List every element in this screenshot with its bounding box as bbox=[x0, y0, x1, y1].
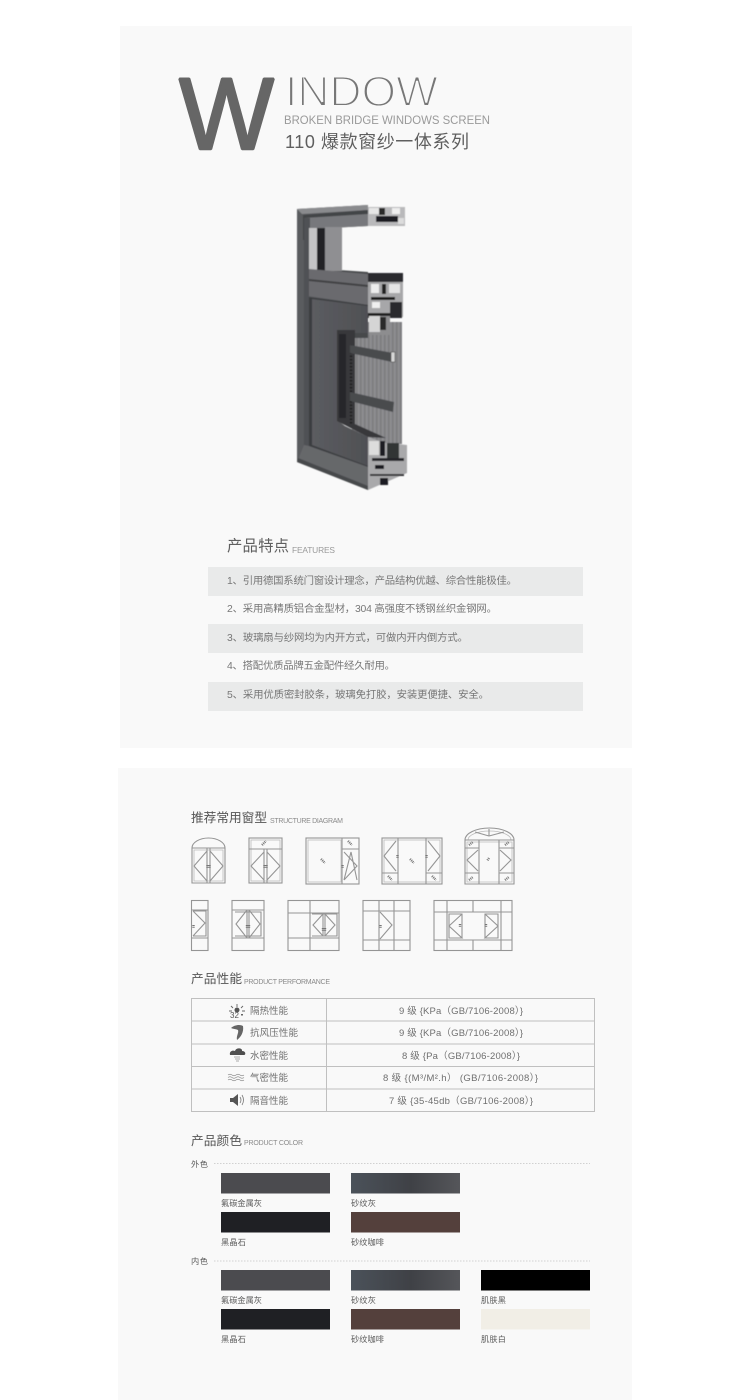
title: WINDOW bbox=[179, 57, 438, 171]
row: heat insulation bbox=[229, 1004, 523, 1020]
heading: performance: PRODUCT PERFORMANCE bbox=[244, 979, 330, 986]
swatch: fluorocarbon metal grey: 氟碳金属灰 bbox=[221, 1295, 262, 1305]
feature 3 bbox=[208, 624, 583, 653]
row: air tightness bbox=[228, 1072, 538, 1084]
colors: interior bbox=[191, 1256, 590, 1344]
colors: exterior bbox=[191, 1159, 590, 1247]
window type 5 bbox=[465, 828, 514, 884]
feature list bbox=[208, 567, 583, 711]
feature 1 bbox=[208, 567, 583, 596]
row: water tightness bbox=[230, 1048, 520, 1062]
swatch: skin black: 肌肤黑 bbox=[481, 1295, 506, 1305]
feature 2: 2、采用高精质铝合金型材，304 高强度不锈钢丝织金钢网。 bbox=[227, 602, 497, 615]
heading: features bbox=[227, 537, 335, 555]
swatch: sand coffee bbox=[351, 1309, 460, 1344]
swatch: sand grey bbox=[351, 1173, 460, 1208]
icon: sun: 32 bbox=[230, 1011, 239, 1020]
row: air tightness: 气密性能 bbox=[250, 1072, 288, 1084]
bottom section end bbox=[368, 437, 407, 490]
window type 9 bbox=[363, 900, 410, 950]
row: water tightness: 8 级 {Pa（GB/7106-2008）} bbox=[402, 1050, 520, 1062]
row: sound insulation: 7 级 {35-45db（GB/7106-2008）} bbox=[389, 1095, 533, 1107]
label: exterior: 外色 bbox=[191, 1159, 208, 1169]
swatch: black crystal bbox=[221, 1212, 330, 1247]
title: WINDOW: INDOW bbox=[285, 68, 438, 116]
icon: air waves bbox=[228, 1074, 244, 1081]
swatch: sand coffee: 砂纹咖啡 bbox=[351, 1334, 384, 1344]
heading: color: 产品颜色 bbox=[191, 1133, 242, 1148]
performance table bbox=[192, 998, 594, 1112]
swatch: sand grey bbox=[351, 1270, 460, 1305]
row: air tightness: 8 级 {(M³/M².h） (GB/7106-2008）} bbox=[383, 1072, 538, 1084]
window type 3 bbox=[306, 838, 359, 884]
swatch: sand grey: 砂纹灰 bbox=[351, 1295, 376, 1305]
heading: performance: 产品性能 bbox=[191, 972, 242, 986]
swatch: black crystal: 黑晶石 bbox=[221, 1335, 246, 1344]
row: sound insulation: 隔音性能 bbox=[250, 1095, 288, 1107]
window diagrams bbox=[192, 828, 514, 950]
swatch: fluorocarbon metal grey bbox=[221, 1173, 330, 1208]
swatch: skin white: 肌肤白 bbox=[481, 1334, 506, 1344]
row: sound insulation bbox=[230, 1094, 533, 1107]
top section end bbox=[368, 207, 405, 226]
heading: color bbox=[191, 1133, 303, 1148]
subtitle: Chinese series name: 110 爆款窗纱一体系列 bbox=[285, 132, 469, 152]
icon: speaker bbox=[230, 1094, 244, 1106]
heading: structure diagram: 推荐常用窗型 bbox=[191, 811, 267, 825]
heading: performance bbox=[191, 972, 330, 986]
swatch: fluorocarbon metal grey bbox=[221, 1270, 330, 1305]
title: WINDOW: W bbox=[179, 57, 274, 171]
feature 3: 3、玻璃扇与纱网均为内开方式，可做内开内倒方式。 bbox=[227, 631, 468, 644]
heading: features: 产品特点 bbox=[227, 537, 289, 555]
feature 4: 4、搭配优质品牌五金配件经久耐用。 bbox=[227, 659, 395, 672]
swatch: sand grey: 砂纹灰 bbox=[351, 1198, 376, 1208]
swatch: fluorocarbon metal grey: 氟碳金属灰 bbox=[221, 1198, 262, 1208]
window type 1 bbox=[192, 838, 225, 883]
window type 10 bbox=[434, 900, 512, 950]
feature 5 bbox=[208, 682, 583, 711]
heading: features: FEATURES bbox=[292, 545, 335, 555]
row: wind pressure bbox=[231, 1025, 523, 1040]
swatch: black crystal: 黑晶石 bbox=[221, 1238, 246, 1247]
heading: color: PRODUCT COLOR bbox=[244, 1140, 303, 1147]
swatch: black crystal bbox=[221, 1309, 330, 1344]
row: wind pressure: 9 级 {KPa（GB/7106-2008）} bbox=[399, 1027, 523, 1039]
heading: structure diagram: STRUCTURE DIAGRAM bbox=[270, 818, 343, 825]
heading: structure diagram bbox=[191, 811, 343, 825]
panel: product overview bbox=[120, 26, 632, 748]
swatch: sand coffee bbox=[351, 1212, 460, 1247]
row: water tightness: 水密性能 bbox=[250, 1050, 288, 1062]
swatch: skin black bbox=[481, 1270, 590, 1305]
icon: sun bbox=[229, 1004, 245, 1020]
middle section end bbox=[368, 273, 403, 335]
row: wind pressure: 抗风压性能 bbox=[250, 1027, 298, 1039]
row: heat insulation: 隔热性能 bbox=[250, 1005, 288, 1017]
icon: wind bbox=[231, 1025, 243, 1040]
window type 8 bbox=[288, 900, 339, 950]
window type 4 bbox=[382, 838, 442, 884]
window type 2 bbox=[249, 838, 282, 883]
feature 1: 1、引用德国系统门窗设计理念，产品结构优越、综合性能极佳。 bbox=[227, 574, 517, 587]
swatch: skin white bbox=[481, 1309, 590, 1344]
window type 6 bbox=[192, 900, 208, 950]
product illustration: window profile cross-section bbox=[297, 205, 407, 490]
swatch: sand coffee: 砂纹咖啡 bbox=[351, 1237, 384, 1247]
panel: specifications bbox=[118, 768, 632, 1400]
subtitle: English: BROKEN BRIDGE WINDOWS SCREEN bbox=[284, 113, 490, 127]
row: heat insulation: 9 级 {KPa（GB/7106-2008）} bbox=[399, 1005, 523, 1017]
feature 5: 5、采用优质密封胶条，玻璃免打胶，安装更便捷、安全。 bbox=[227, 688, 489, 701]
window type 7 bbox=[232, 900, 264, 950]
label: interior: 内色 bbox=[191, 1256, 208, 1266]
icon: rain cloud bbox=[230, 1048, 245, 1061]
